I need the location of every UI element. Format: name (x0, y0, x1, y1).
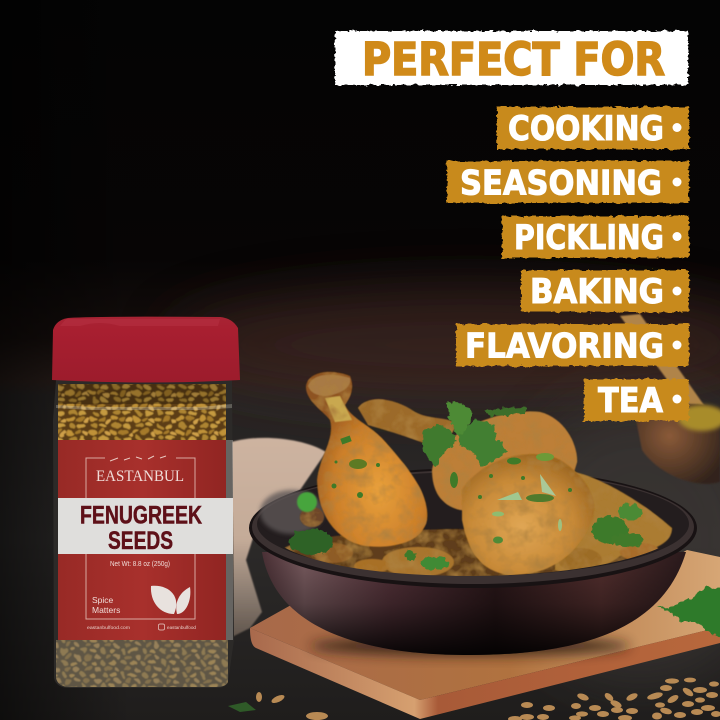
website: eastanbulfood.com (87, 625, 130, 630)
product jar (44, 317, 240, 696)
herbs on chicken (332, 435, 572, 544)
heading banner (335, 31, 688, 86)
item: tea (584, 379, 689, 421)
stew and sauce (280, 470, 672, 577)
icon: leaves (151, 586, 190, 614)
bowl (249, 468, 697, 656)
use list (447, 107, 689, 421)
social handle: eastanbulfood (167, 625, 197, 630)
scattered fenugreek seeds (228, 678, 720, 720)
jar body (53, 380, 234, 688)
item: tea: TEA (598, 381, 664, 421)
product name line two: SEEDS (108, 527, 173, 555)
tagline line two: Matters (92, 605, 120, 615)
cap (52, 317, 240, 382)
jar highlight (56, 404, 232, 410)
icon: instagram (158, 624, 164, 630)
wooden cutting board (250, 550, 720, 719)
logo frame (86, 458, 195, 619)
item: cooking: COOKING (508, 109, 664, 149)
rear chicken piece (358, 399, 577, 520)
cilantro leaf on board (656, 586, 720, 637)
white name band (58, 498, 233, 554)
bottom seed layer (56, 640, 228, 687)
chicken thigh (462, 454, 594, 575)
pea (297, 492, 317, 512)
heading text: PERFECT FOR (362, 33, 665, 86)
chicken curry dish (280, 372, 672, 577)
label (58, 440, 233, 640)
cilantro sprig (422, 402, 525, 467)
linen cloth (226, 438, 326, 640)
greens in stew (289, 504, 643, 569)
top seed layer (58, 384, 226, 440)
logo birds (110, 456, 166, 461)
net weight: Net Wt: 8.8 oz (250g) (110, 561, 170, 568)
logo text: EASTANBUL (96, 468, 184, 485)
background copper bowl and spoon (620, 314, 720, 484)
item: flavoring: FLAVORING (465, 326, 664, 366)
item: baking: BAKING (530, 272, 664, 312)
drumstick (306, 372, 427, 547)
product name: FENUGREEK (80, 502, 202, 530)
item: pickling: PICKLING (514, 218, 664, 258)
item: seasoning: SEASONING (460, 164, 662, 204)
tagline: Spice (92, 595, 114, 605)
